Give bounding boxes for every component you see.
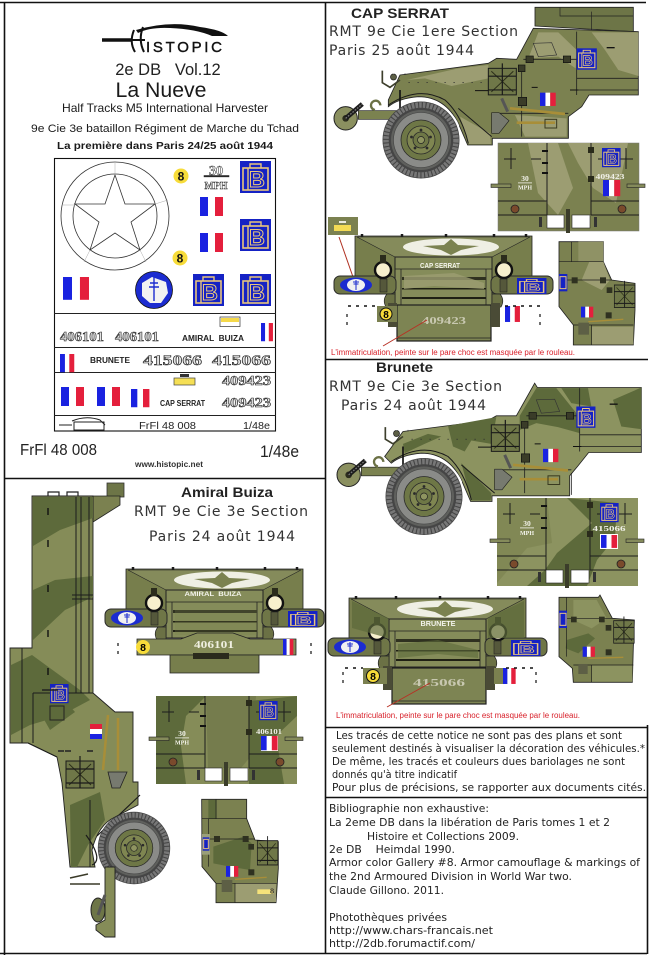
text block: bibliography: Bibliographie non exhaustive: xyxy=(329,802,489,815)
text block: bibliography: http://2db.forumactif.com/ xyxy=(329,937,475,950)
text block: bibliography xyxy=(329,802,641,950)
vehicle: Brunete front view: 415066 xyxy=(413,677,466,689)
text block: bibliography: Histoire et Collections 2009. xyxy=(367,830,519,843)
vehicle: CAP SERRAT rear view: 409423 xyxy=(596,173,625,181)
heading: Brunete: RMT 9e Cie 3e Section xyxy=(329,379,502,395)
vehicle: Amiral Buiza front view xyxy=(105,567,324,673)
vehicle: Amiral Buiza rear view xyxy=(149,696,303,786)
vehicle: Amiral Buiza small side view xyxy=(202,799,278,903)
decal: 30 MPH: 30 xyxy=(209,164,223,179)
decal: 30 MPH: MPH xyxy=(204,180,228,192)
decal: registration numbers: 406101 xyxy=(115,330,159,345)
logo: Histopic: ISTOPIC xyxy=(146,39,222,56)
vehicle: Brunete rear view: 30 xyxy=(523,519,531,528)
heading: CAP SERRAT xyxy=(329,5,518,59)
vehicle: Brunete small side view xyxy=(559,595,634,682)
heading: CAP SERRAT: Paris 25 août 1944 xyxy=(329,43,474,59)
panel: title block xyxy=(31,24,299,152)
vehicle: Brunete front view xyxy=(328,596,547,704)
vehicle: Brunete rear view xyxy=(490,498,644,588)
vehicle: CAP SERRAT front view: CAP SERRAT xyxy=(420,263,461,270)
sheet footer xyxy=(59,418,270,432)
text block: disclaimer: Les tracés de cette notice ne sont pas des plans et sont xyxy=(336,730,622,742)
vehicle: Brunete rear view: MPH xyxy=(520,531,534,537)
vehicle: Brunete side view xyxy=(337,383,641,535)
sheet footer: 1/48e xyxy=(243,421,270,432)
text block: bibliography: the 2nd Armoured Division in World War two. xyxy=(329,870,572,883)
vehicle: Amiral Buiza rear view: 406101 xyxy=(256,727,282,736)
note: registration hidden by roller xyxy=(336,683,580,720)
decal: registration numbers: 409423 xyxy=(222,396,271,411)
heading: Amiral Buiza: RMT 9e Cie 3e Section xyxy=(134,504,308,520)
decal: vehicle names: AMIRAL BUIZA xyxy=(182,334,244,343)
vehicle: Amiral Buiza front view: 8 xyxy=(140,642,146,654)
decal: yellow number 8: 8 xyxy=(178,170,185,184)
text block: disclaimer: donnés qu'à titre indicatif xyxy=(332,769,457,781)
vehicle: Amiral Buiza front view: 406101 xyxy=(194,639,234,651)
vehicle: Brunete front view: 8 xyxy=(370,671,376,683)
subtitle: date: La première dans Paris 24/25 août 1944 xyxy=(57,140,273,152)
heading: Amiral Buiza: Paris 24 août 1944 xyxy=(149,529,295,545)
decal: registration numbers: 415066 xyxy=(143,353,203,369)
text block: bibliography: Photothèques privées xyxy=(329,911,447,924)
panel: decal sheet xyxy=(54,158,276,432)
text block: bibliography: Armor color Gallery #8. Armor camouflage & markings of xyxy=(329,856,641,869)
decal: yellow number 8 xyxy=(172,168,188,266)
decal: French flags xyxy=(60,197,273,407)
note: registration hidden by roller: L'immatriculation, peinte sur le pare choc est masquée par le rouleau. xyxy=(331,348,575,357)
text block: disclaimer: De même, les tracés et couleurs dues bariolages ne sont xyxy=(332,756,625,768)
decal: yellow plates xyxy=(174,317,240,385)
sheet reference and scale: FrFl 48 008 xyxy=(20,442,97,459)
note: registration hidden by roller: L'immatriculation, peinte sur le pare choc est masquée par le rouleau. xyxy=(336,711,580,720)
vehicle: CAP SERRAT rear view: MPH xyxy=(518,186,532,192)
callout: yellow plate detail and arrow xyxy=(328,217,358,277)
vehicle: Amiral Buiza rear view: MPH xyxy=(175,740,189,746)
vehicle: CAP SERRAT side view xyxy=(334,7,638,178)
heading: Amiral Buiza xyxy=(134,484,308,545)
decal: 30 MPH xyxy=(204,164,229,192)
vehicle: CAP SERRAT small side view xyxy=(559,242,635,345)
vehicle: Amiral Buiza rear view: 30 xyxy=(178,729,186,738)
text block: bibliography: Claude Gillono. 2011. xyxy=(329,884,444,897)
text block: disclaimer xyxy=(332,730,646,794)
vehicle: CAP SERRAT rear view xyxy=(491,143,645,233)
camouflage patches xyxy=(11,497,105,867)
vehicle: CAP SERRAT front view: 8 xyxy=(383,310,389,321)
heading: Brunete xyxy=(329,360,502,414)
decal: white star roundel xyxy=(61,162,169,270)
text block: disclaimer: seulement destinés à visualiser la décoration des véhicules.* xyxy=(332,743,645,755)
heading: Brunete: Brunete xyxy=(376,360,434,375)
decal: registration numbers: 409423 xyxy=(222,374,271,389)
decal: vehicle names: CAP SERRAT xyxy=(160,399,205,408)
sheet reference and scale xyxy=(20,442,299,469)
heading: Brunete: Paris 24 août 1944 xyxy=(341,398,486,414)
heading: CAP SERRAT: RMT 9e Cie 1ere Section xyxy=(329,24,518,40)
text block: bibliography: http://www.chars-francais.net xyxy=(329,924,494,937)
vehicle: Amiral Buiza front view: AMIRAL BUIZA xyxy=(184,591,242,598)
subtitle: unit: 9e Cie 3e bataillon Régiment de Marche du Tchad xyxy=(31,123,299,135)
heading: Amiral Buiza: Amiral Buiza xyxy=(181,484,273,500)
vehicle: Brunete rear view: 415066 xyxy=(592,525,626,533)
decal: division badges xyxy=(193,161,271,306)
vehicle: Amiral Buiza side view xyxy=(10,483,170,937)
vehicle: Brunete front view: BRUNETE xyxy=(420,621,456,628)
vehicle: Amiral Buiza small side view: 8 xyxy=(270,886,274,895)
decal: Cross of Lorraine map roundel xyxy=(136,272,172,308)
logo: Histopic xyxy=(102,24,228,56)
decal: yellow number 8: 8 xyxy=(177,252,184,266)
text block: disclaimer: Pour plus de précisions, se rapporter aux documents cités. xyxy=(332,782,646,794)
decal: vehicle names: BRUNETE xyxy=(90,356,131,365)
decal: registration numbers: 406101 xyxy=(60,330,104,345)
sheet reference and scale: 1/48e xyxy=(260,443,299,461)
heading: La Nueve: La Nueve xyxy=(116,79,206,102)
sheet reference and scale: www.histopic.net xyxy=(134,459,203,469)
heading: CAP SERRAT: CAP SERRAT xyxy=(351,5,449,21)
sheet footer: FrFl 48 008 xyxy=(139,420,196,432)
vehicle: CAP SERRAT front view: 409423 xyxy=(422,315,467,327)
subtitle: vehicle: Half Tracks M5 International Harvester xyxy=(62,102,268,115)
heading: volume: 2e DB Vol.12 xyxy=(115,61,221,79)
text block: bibliography: 2e DB Heimdal 1990. xyxy=(329,843,455,856)
vehicle: CAP SERRAT rear view: 30 xyxy=(521,174,529,183)
decal: vehicle names xyxy=(90,334,244,408)
decal: registration numbers: 415066 xyxy=(212,353,272,369)
note: registration hidden by roller xyxy=(331,320,575,357)
vehicle: CAP SERRAT front view xyxy=(334,234,553,341)
decal: registration numbers xyxy=(60,330,272,411)
text block: bibliography: La 2eme DB dans la libération de Paris tomes 1 et 2 xyxy=(329,816,610,829)
